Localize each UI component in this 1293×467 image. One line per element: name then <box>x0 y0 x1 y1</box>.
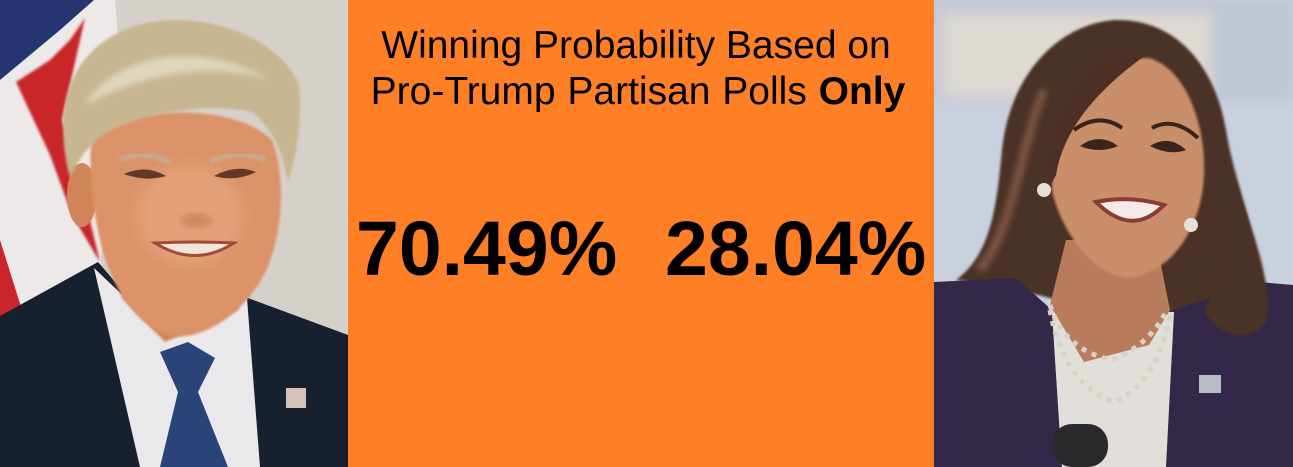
panel: left portrait <box>0 0 348 467</box>
hair over right shoulder <box>1196 170 1268 335</box>
face <box>1052 58 1204 278</box>
brows <box>120 154 265 163</box>
heading <box>371 24 906 113</box>
stat: right percentage: 28.04% <box>665 206 926 292</box>
shirt <box>94 268 260 467</box>
neck <box>112 250 246 342</box>
hair highlights <box>979 90 1044 270</box>
jacket <box>934 278 1062 467</box>
eyes <box>124 169 166 179</box>
eyes <box>1080 139 1118 150</box>
heading: Winning Probability Based on <box>381 24 891 67</box>
background wall <box>0 0 348 467</box>
brows <box>1074 120 1198 138</box>
smile <box>1096 199 1164 221</box>
cheek shading <box>138 165 242 265</box>
face <box>90 112 281 337</box>
flag pin <box>1199 375 1221 393</box>
tie <box>160 342 228 467</box>
heading: Pro-Trump Partisan Polls Only <box>371 70 905 113</box>
hair highlight <box>85 56 270 105</box>
panel: orange centre <box>348 0 934 467</box>
suit <box>0 262 348 467</box>
neck <box>1050 240 1170 362</box>
background <box>934 0 1293 467</box>
earrings <box>1037 183 1198 232</box>
hair <box>956 20 1263 340</box>
lapel pin <box>286 388 306 408</box>
nose <box>180 214 214 228</box>
top <box>1052 312 1174 467</box>
panel: right portrait <box>934 0 1293 467</box>
flag <box>0 0 120 320</box>
necklace <box>1050 305 1170 402</box>
stat: left percentage: 70.49% <box>356 206 617 292</box>
microphone <box>1052 424 1108 467</box>
ear <box>67 163 97 227</box>
smile <box>155 242 234 256</box>
fringe <box>1047 54 1146 190</box>
hair <box>63 20 300 182</box>
blurred sign <box>934 0 1293 100</box>
